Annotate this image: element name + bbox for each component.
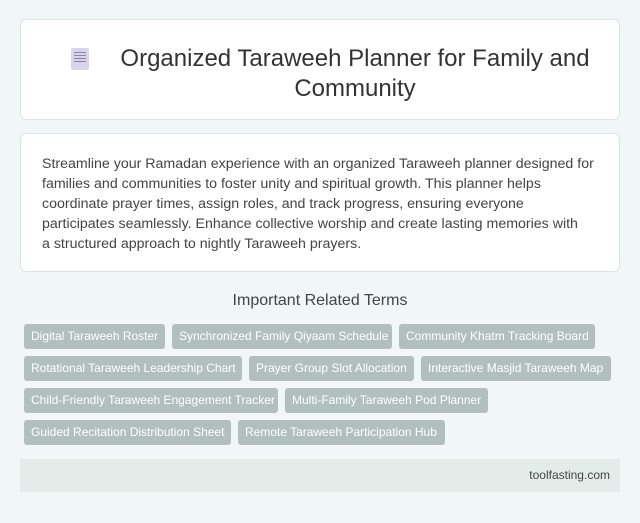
tags: Prayer Group Slot Allocation [256, 361, 407, 375]
description text: participates seamlessly. Enhance collective worship and create lasting memories with [42, 216, 578, 232]
footer text: toolfasting.com [529, 468, 610, 482]
icon: document [71, 48, 89, 70]
tags: Guided Recitation Distribution Sheet [31, 425, 224, 439]
tags: Rotational Taraweeh Leadership Chart [31, 361, 236, 375]
tags: Community Khatm Tracking Board [406, 329, 589, 343]
description text: coordinate prayer times, assign roles, and track progress, ensuring everyone [42, 196, 524, 212]
related terms heading: Important Related Terms [233, 292, 407, 309]
title: Organized Taraweeh Planner for Family and Community [120, 45, 590, 102]
description card [20, 133, 620, 272]
tags: Synchronized Family Qiyaam Schedule [179, 329, 388, 343]
tags: Child-Friendly Taraweeh Engagement Tracker [31, 393, 275, 407]
tags: Interactive Masjid Taraweeh Map [428, 361, 603, 375]
header card [20, 19, 620, 120]
description text: Streamline your Ramadan experience with an organized Taraweeh planner designed for [42, 156, 594, 172]
tags: Remote Taraweeh Participation Hub [245, 425, 437, 439]
tags: Multi-Family Taraweeh Pod Planner [292, 393, 481, 407]
footer [20, 459, 620, 492]
tags: Digital Taraweeh Roster [31, 329, 158, 343]
description text: families and communities to foster unity and spiritual growth. This planner helps [42, 176, 541, 192]
description text: a structured approach to nightly Taraweeh prayers. [42, 236, 361, 252]
description text [42, 156, 594, 252]
